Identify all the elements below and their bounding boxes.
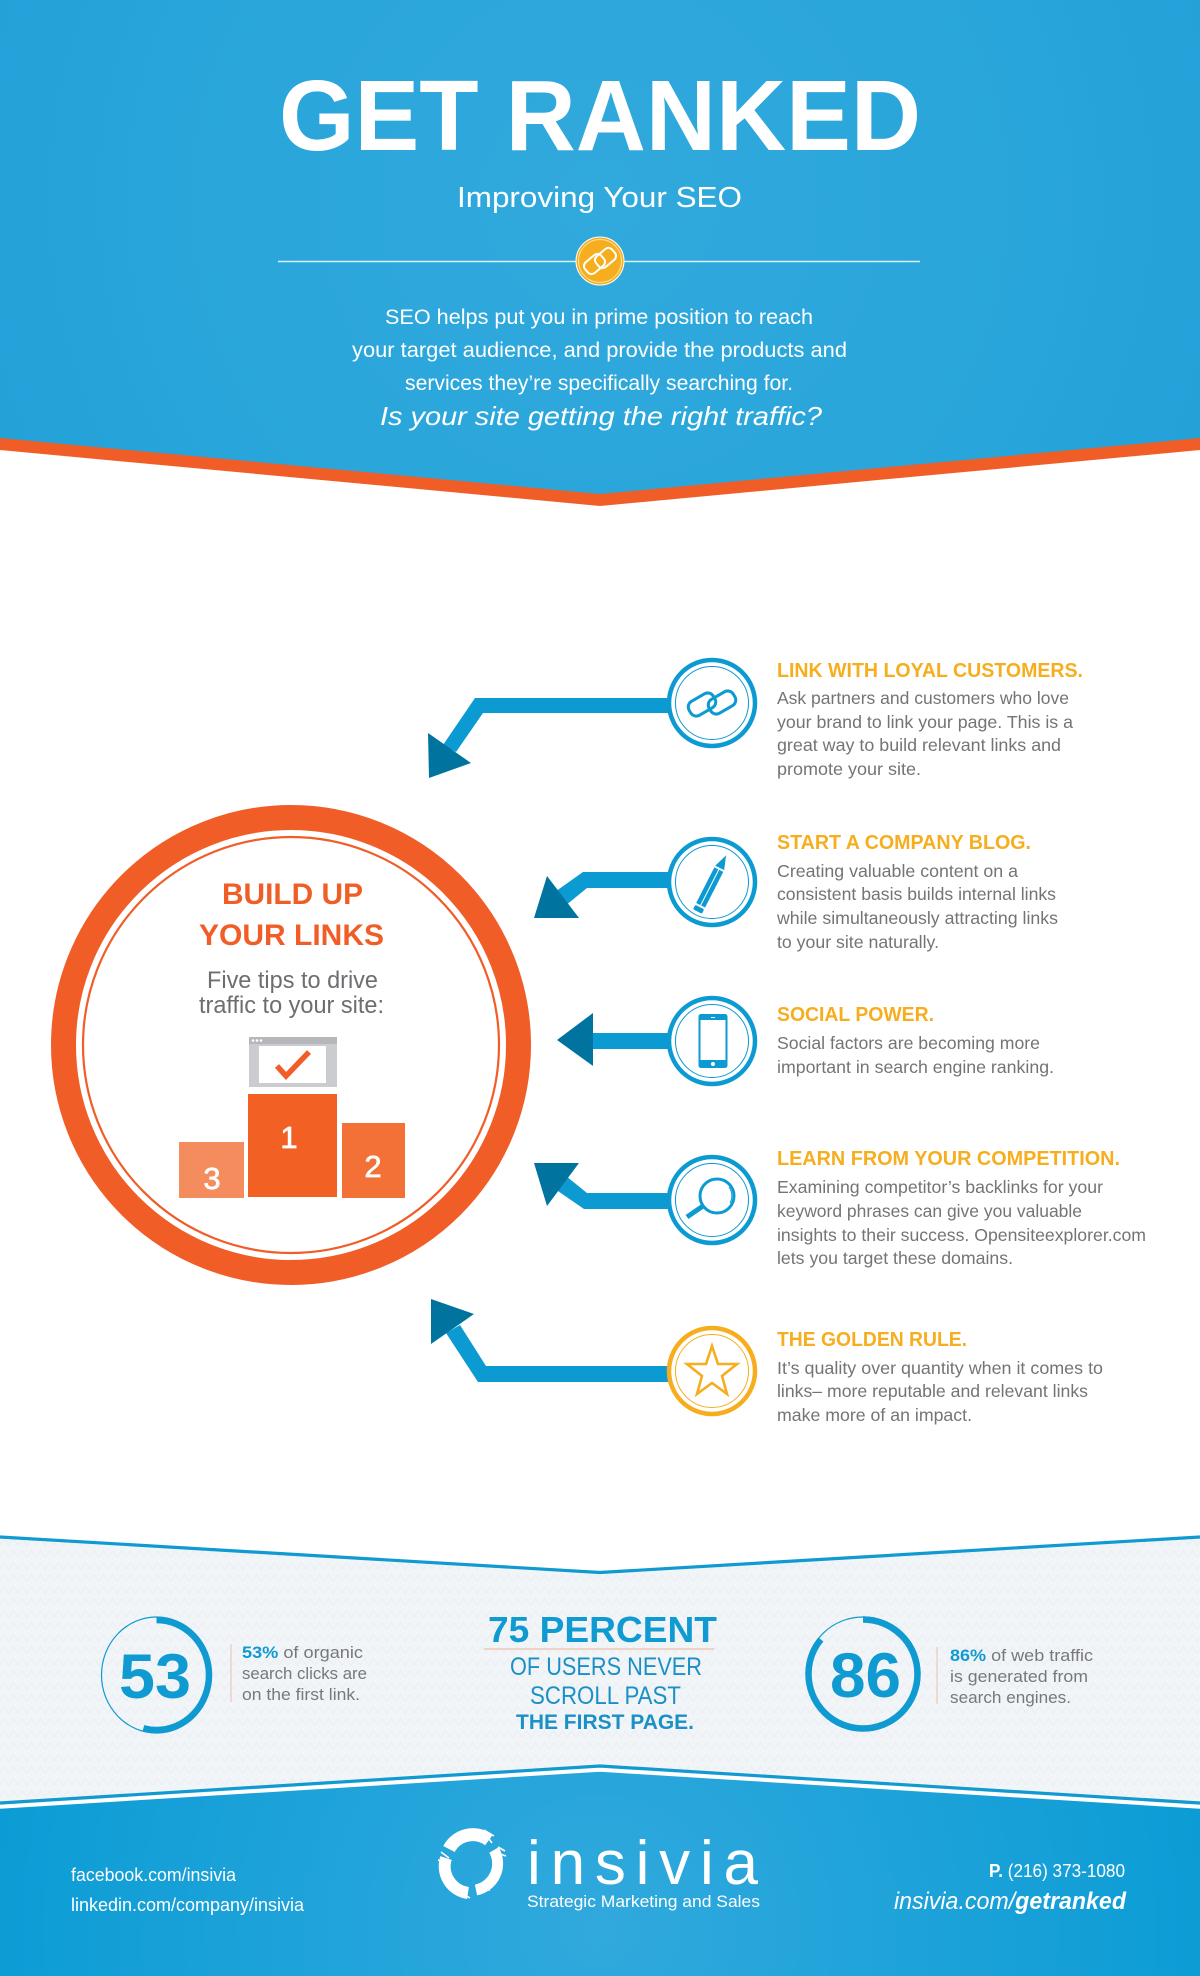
stat caption: search engines. bbox=[950, 1688, 1071, 1707]
tip text: important in search engine ranking. bbox=[777, 1057, 1054, 1077]
stat: 75 percent: SCROLL PAST bbox=[530, 1682, 681, 1710]
icon: brush ring bbox=[438, 1830, 506, 1898]
tip text: great way to build relevant links and bbox=[777, 735, 1061, 755]
stat caption bbox=[242, 1643, 367, 1704]
ring chart bbox=[102, 1617, 212, 1733]
tip text: Social factors are becoming more bbox=[777, 1033, 1040, 1053]
tip text: to your site naturally. bbox=[777, 932, 939, 952]
divider with link badge bbox=[278, 237, 920, 285]
logo: Strategic Marketing and Sales bbox=[527, 1892, 760, 1911]
intro text: SEO helps put you in prime position to reach bbox=[385, 306, 813, 329]
stat caption: 53% of organic bbox=[242, 1643, 364, 1662]
intro text: your target audience, and provide the products and bbox=[352, 339, 847, 362]
panel heading bbox=[199, 878, 384, 952]
intro text bbox=[352, 306, 847, 431]
icon: pencil bbox=[669, 839, 755, 925]
ring chart bbox=[806, 1617, 920, 1731]
tip text: START A COMPANY BLOG. bbox=[777, 832, 1031, 854]
podium: 1 bbox=[280, 1120, 298, 1155]
stat: 75 percent: OF USERS NEVER bbox=[510, 1653, 702, 1681]
stat number: 53 bbox=[119, 1642, 191, 1712]
tip text: Creating valuable content on a bbox=[777, 861, 1018, 881]
tip 1: link with loyal customers bbox=[428, 660, 1083, 779]
podium: 2 bbox=[364, 1149, 382, 1184]
tip 3: social power bbox=[557, 998, 1054, 1084]
contact details bbox=[894, 1861, 1127, 1915]
tip 2: start a company blog bbox=[534, 832, 1058, 952]
podium bbox=[179, 1094, 405, 1198]
icon: browser with check bbox=[249, 1037, 337, 1087]
panel heading: YOUR LINKS bbox=[199, 919, 384, 952]
tip text bbox=[777, 1329, 1103, 1425]
stat number: 86 bbox=[830, 1641, 901, 1711]
orange ring bbox=[64, 818, 518, 1272]
tip text: while simultaneously attracting links bbox=[776, 908, 1058, 928]
tip text bbox=[777, 1004, 1054, 1077]
intro text: Is your site getting the right traffic? bbox=[380, 401, 823, 431]
subtitle: Improving Your SEO bbox=[457, 182, 742, 214]
stat: 75 percent bbox=[484, 1609, 717, 1734]
stat caption: search clicks are bbox=[242, 1664, 367, 1683]
stat caption bbox=[950, 1646, 1094, 1707]
tip text: SOCIAL POWER. bbox=[777, 1004, 934, 1026]
stat: 53 percent bbox=[102, 1617, 367, 1733]
arrow bbox=[557, 1013, 670, 1066]
panel intro: traffic to your site: bbox=[199, 992, 384, 1019]
tip text: Examining competitor’s backlinks for your bbox=[777, 1177, 1103, 1197]
tip text: make more of an impact. bbox=[777, 1405, 972, 1425]
social links bbox=[71, 1865, 305, 1915]
icon: phone bbox=[669, 998, 755, 1084]
tip text: lets you target these domains. bbox=[777, 1248, 1013, 1268]
tip text: Ask partners and customers who love bbox=[777, 688, 1069, 708]
contact details: P. (216) 373-1080 bbox=[989, 1861, 1125, 1881]
tip text bbox=[776, 832, 1058, 952]
stat: 75 percent: THE FIRST PAGE. bbox=[516, 1711, 694, 1734]
podium: 3 bbox=[203, 1161, 221, 1196]
icon: star bbox=[669, 1328, 755, 1414]
panel intro: Five tips to drive bbox=[207, 967, 378, 994]
tip text: LINK WITH LOYAL CUSTOMERS. bbox=[777, 660, 1083, 682]
stat: 86 percent bbox=[806, 1617, 1094, 1731]
tip text: keyword phrases can give you valuable bbox=[777, 1201, 1082, 1221]
stat: 75 percent: 75 PERCENT bbox=[488, 1609, 717, 1650]
tip text: consistent basis builds internal links bbox=[777, 884, 1056, 904]
tip text: THE GOLDEN RULE. bbox=[777, 1329, 967, 1351]
social links: linkedin.com/company/insivia bbox=[71, 1895, 305, 1915]
tip text: your brand to link your page. This is a bbox=[777, 712, 1073, 732]
arrow bbox=[428, 698, 670, 778]
tip text: links– more reputable and relevant links bbox=[777, 1381, 1088, 1401]
tip text: It’s quality over quantity when it comes to bbox=[777, 1358, 1103, 1378]
tip 4: learn from your competition bbox=[534, 1148, 1146, 1268]
intro text: services they’re specifically searching for. bbox=[405, 372, 793, 395]
stat caption: on the first link. bbox=[242, 1685, 360, 1704]
arrow bbox=[534, 1163, 670, 1209]
footer bbox=[0, 1766, 1200, 1976]
icon: magnifier bbox=[669, 1157, 755, 1243]
orange chevron edge bbox=[0, 438, 1200, 506]
tip text bbox=[777, 660, 1083, 779]
panel heading: BUILD UP bbox=[222, 878, 363, 911]
panel intro bbox=[199, 967, 384, 1019]
tip text bbox=[777, 1148, 1146, 1268]
tip text: insights to their success. Opensiteexplorer.com bbox=[777, 1225, 1146, 1245]
panel: build up your links bbox=[64, 818, 518, 1272]
stat caption: is generated from bbox=[950, 1667, 1088, 1686]
stat caption: 86% of web traffic bbox=[950, 1646, 1094, 1665]
tip text: LEARN FROM YOUR COMPETITION. bbox=[777, 1148, 1120, 1170]
social links: facebook.com/insivia bbox=[71, 1865, 237, 1885]
header banner bbox=[0, 0, 1200, 506]
icon: chain link bbox=[669, 660, 755, 746]
logo: insivia bbox=[527, 1829, 759, 1898]
logo bbox=[438, 1829, 760, 1911]
arrow bbox=[431, 1299, 670, 1382]
title: GET RANKED bbox=[279, 60, 921, 172]
contact details: insivia.com/getranked bbox=[894, 1888, 1127, 1915]
tip text: promote your site. bbox=[777, 759, 921, 779]
stats band bbox=[0, 1537, 1200, 1805]
tip 5: the golden rule bbox=[431, 1299, 1103, 1425]
arrow bbox=[534, 872, 670, 918]
